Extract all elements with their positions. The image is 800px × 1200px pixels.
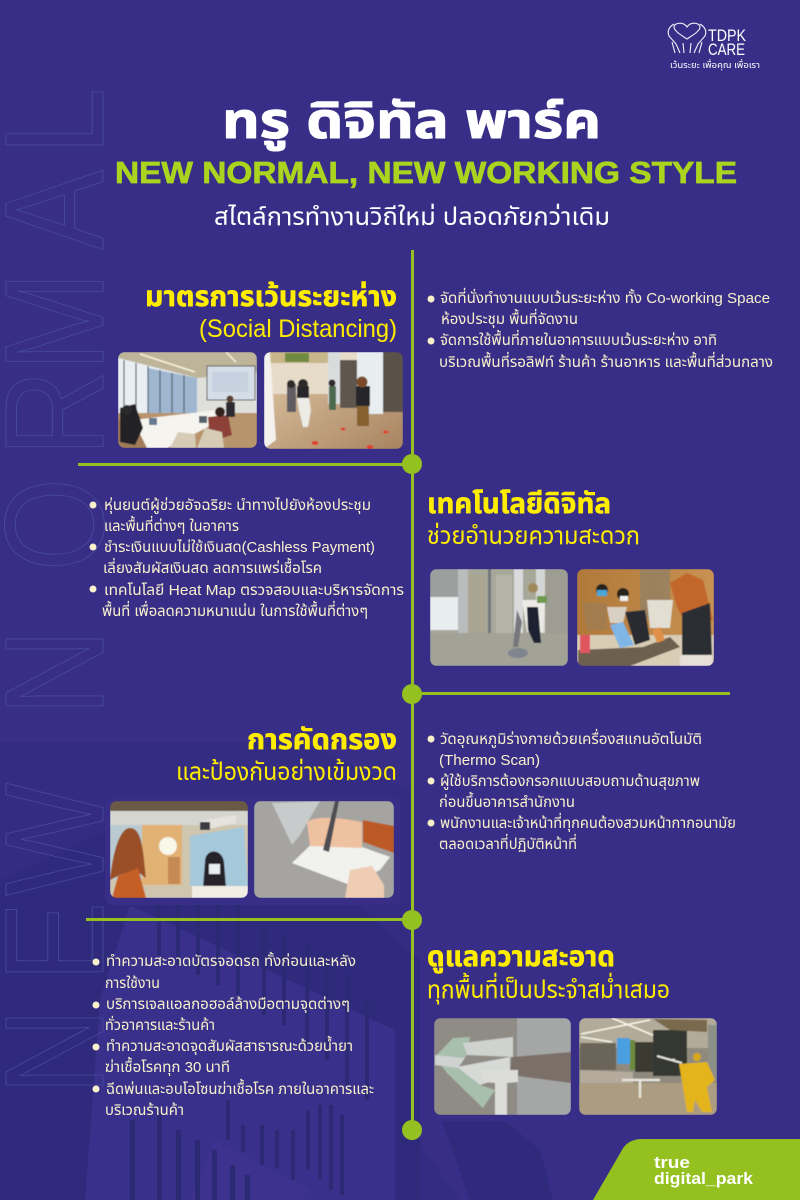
photo: cashless counter — [577, 569, 714, 666]
text block: bullets: พื้นที่ เพื่อลดความหนาแน่น ในการใช้พื้นที่ต่างๆ — [102, 600, 368, 620]
text block: bullets: จัดการใช้พื้นที่ภายในอาคารแบบเว้นระยะห่าง อาทิ — [440, 329, 717, 349]
text block: bullets: ห้องประชุม พื้นที่จัดงาน — [441, 308, 578, 328]
text block: bullets: (Thermo Scan) — [439, 752, 540, 769]
photo backing — [105, 797, 400, 905]
panel: cleaning — [92, 941, 717, 1119]
title: ทรู ดิจิทัล พาร์ค — [222, 93, 601, 151]
text block: bullets: ชำระเงินแบบไม่ใช้เงินสด(Cashless Payment) — [104, 538, 375, 556]
logo: TDPK Care: TDPK — [708, 26, 747, 45]
photo: thermal scanner — [110, 801, 248, 898]
text block: bullets — [428, 287, 773, 371]
panel: digital technology — [90, 488, 714, 666]
heading: การคัดกรอง — [247, 724, 397, 755]
logo: true digital park: digital_park — [654, 1169, 754, 1188]
panel: screening — [105, 724, 736, 905]
text block: bullets: เทคโนโลยี Heat Map ตรวจสอบและบริหารจัดการ — [104, 582, 404, 599]
text block: bullets — [92, 951, 374, 1119]
heading: เทคโนโลยีดิจิทัล — [427, 488, 611, 519]
photo: disinfection spraying — [579, 1018, 717, 1115]
panel: social distancing — [118, 281, 773, 449]
text block: bullets: ทั่วอาคารและร้านค้า — [105, 1015, 215, 1034]
text block: bullets: ก่อนขึ้นอาคารสำนักงาน — [439, 791, 575, 811]
text block: bullets: ผู้ใช้บริการต้องกรอกแบบสอบถามด้านสุขภาพ — [440, 773, 700, 790]
heading: มาตรการเว้นระยะห่าง — [145, 281, 397, 312]
photo: robot — [430, 569, 568, 666]
text block: bullets: และพื้นที่ต่างๆ ในอาคาร — [104, 515, 239, 535]
subtitle: thai: สไตล์การทำงานวิถีใหม่ ปลอดภัยกว่าเดิม — [214, 203, 610, 231]
logo: TDPK Care — [668, 23, 760, 70]
panel: screening: และป้องกันอย่างเข้มงวด — [176, 758, 397, 786]
text block: bullets: หุ่นยนต์ผู้ช่วยอัจฉริยะ นำทางไปยังห้องประชุม — [104, 496, 371, 514]
panel: cleaning: ทุกพื้นที่เป็นประจำสม่ำเสมอ — [427, 972, 670, 1005]
panel: social distancing: (Social Distancing) — [199, 315, 397, 343]
text block: bullets: วัดอุณหภูมิร่างกายด้วยเครื่องสแกนอัตโนมัติ — [440, 728, 702, 748]
text block: bullets: ตลอดเวลาที่ปฏิบัติหน้าที่ — [439, 833, 577, 853]
text block: bullets: ฆ่าเชื้อโรคทุก 30 นาที — [105, 1056, 230, 1076]
text block: bullets — [90, 496, 404, 620]
text block: bullets: การใช้งาน — [105, 975, 160, 992]
text block: bullets: ทำความสะอาดจุดสัมผัสสาธารณะด้วยน้ำยา — [106, 1035, 353, 1055]
logo: true digital park: true — [654, 1153, 690, 1172]
text block: bullets: ทำความสะอาดบัตรจอดรถ ทั้งก่อนและหลัง — [106, 951, 356, 970]
timeline — [78, 250, 730, 1140]
text block: bullets — [428, 728, 736, 853]
text block: bullets: เลี่ยงสัมผัสเงินสด ลดการแพร่เชื้อโรค — [103, 557, 322, 577]
photo: wiping with gloves — [434, 1018, 571, 1115]
panel: digital technology: ช่วยอำนวยความสะดวก — [427, 522, 640, 550]
photo: filling a form — [254, 801, 394, 898]
photo: queue with floor markers — [264, 352, 403, 449]
text block: bullets: จัดที่นั่งทำงานแบบเว้นระยะห่าง ทั้ง Co-working Space — [440, 287, 770, 307]
subtitle: new normal: NEW NORMAL, NEW WORKING STYLE — [115, 155, 737, 190]
background building image — [0, 742, 553, 1200]
logo: true digital park — [593, 1139, 800, 1200]
text block: bullets: บริเวณพื้นที่รอลิฟท์ ร้านค้า ร้านอาหาร และพื้นที่ส่วนกลาง — [439, 351, 773, 371]
heading: ดูแลความสะอาด — [427, 941, 615, 974]
logo: TDPK Care: CARE — [708, 40, 745, 59]
text block: bullets: บริเวณร้านค้า — [105, 1102, 184, 1119]
logo: TDPK Care: เว้นระยะ เพื่อคุณ เพื่อเรา — [670, 58, 760, 70]
text block: bullets: บริการเจลแอลกอฮอล์ล้างมือตามจุดต่างๆ — [106, 995, 350, 1013]
icon: heart in hands — [668, 23, 706, 53]
text block: bullets: ฉีดพ่นและอบโอโซนฆ่าเชื้อโรค ภายในอาคารและ — [106, 1078, 374, 1098]
text block: bullets: พนักงานและเจ้าหน้าที่ทุกคนต้องสวมหน้ากากอนามัย — [440, 812, 736, 832]
photo: meeting room — [118, 352, 257, 448]
